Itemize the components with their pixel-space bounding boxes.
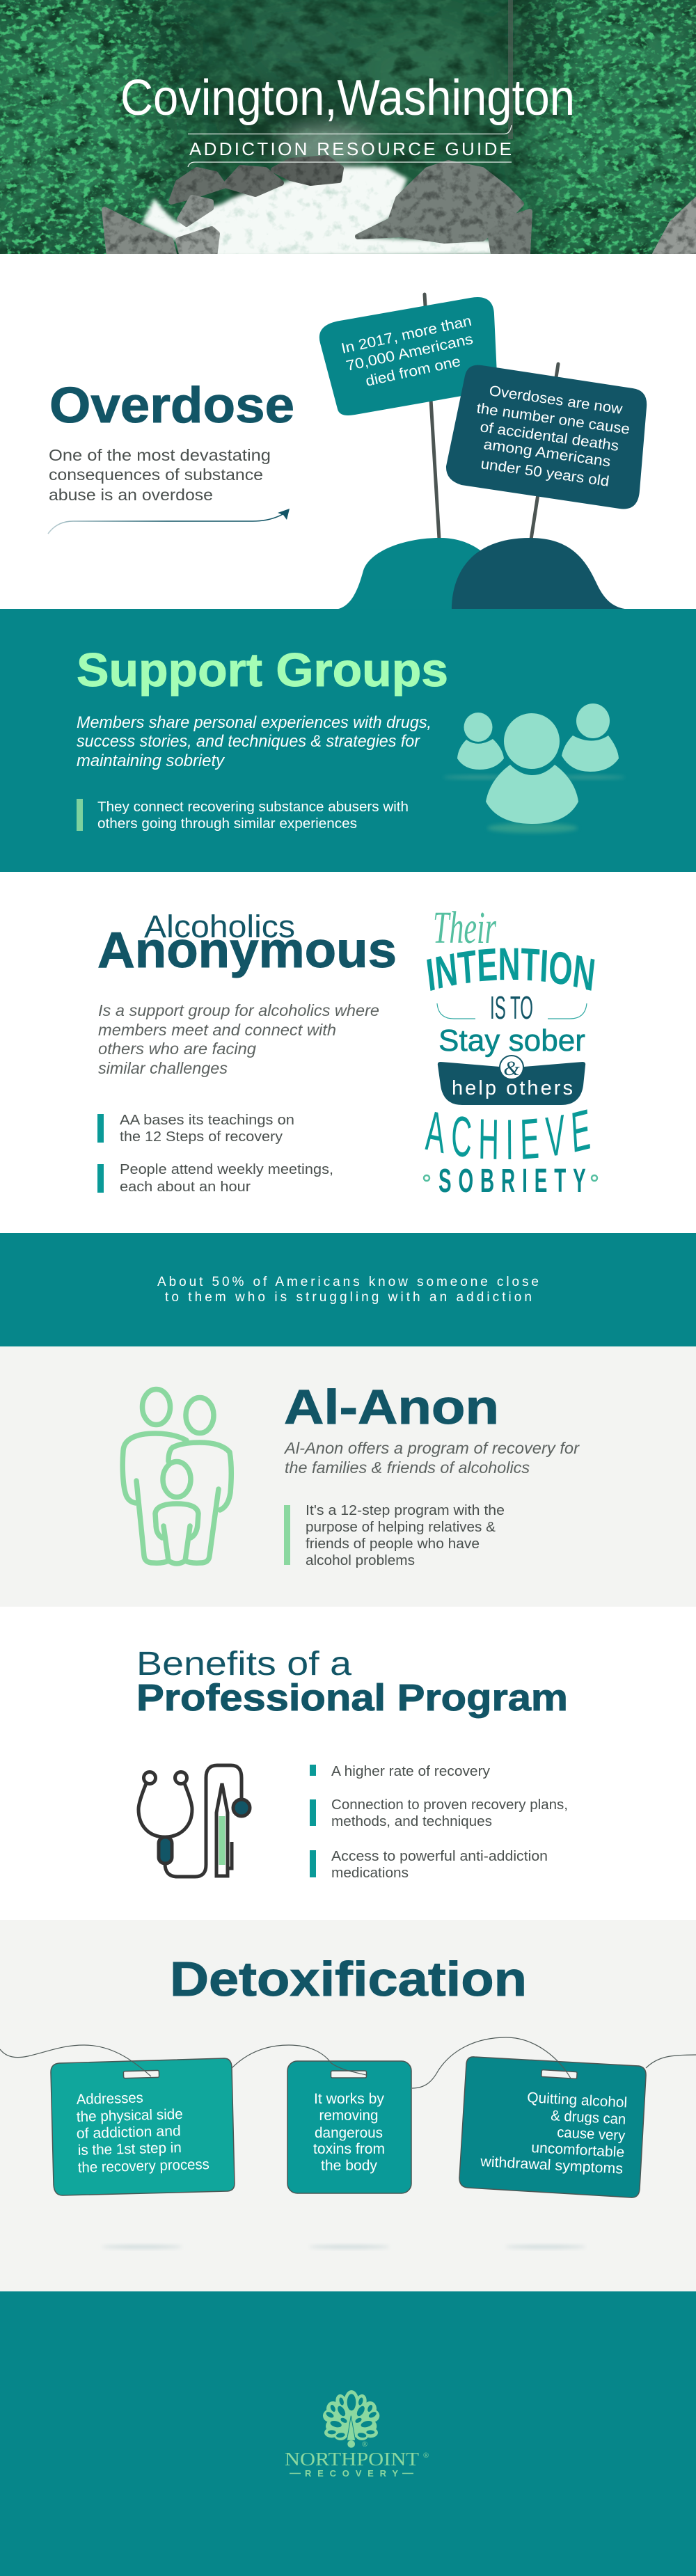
text: fifty percent statistic: [157, 1275, 539, 1305]
heading: benefits: Benefits of a: [136, 1646, 351, 1683]
text block: support description: success stories, and techniques & strategies for: [77, 732, 420, 751]
card: withdrawal symptoms: & drugs can: [551, 2108, 626, 2128]
sign: statistic two: [446, 365, 647, 509]
text: fifty percent statistic: to them who is struggling with an addiction: [165, 1290, 532, 1305]
callout: connect: others going through similar experiences: [97, 816, 357, 832]
panel: al-anon: [0, 1346, 696, 1607]
text block: AA description: Is a support group for alcoholics where: [98, 1001, 379, 1019]
text block: al-anon description: [283, 1439, 580, 1477]
heading: alcoholics anonymous: Alcoholics: [144, 909, 295, 944]
card: withdrawal symptoms: uncomfortable: [531, 2140, 625, 2161]
sign: statistic one: In 2017, more than: [340, 313, 473, 357]
rocks: [104, 158, 696, 257]
sign: statistic one: 70,000 Americans: [345, 331, 475, 374]
shadows under cards: [102, 2245, 586, 2248]
callout: twelve step program: alcohol problems: [306, 1553, 415, 1568]
sign: statistic two: among Americans: [482, 436, 612, 470]
card: removes toxins: the body: [321, 2158, 377, 2174]
typographic lockup: their intention: &: [503, 1057, 520, 1080]
heading: support groups: Support Groups: [77, 644, 448, 697]
card: withdrawal symptoms: Quitting alcohol: [527, 2090, 628, 2111]
heading: alcoholics anonymous: Anonymous: [97, 923, 397, 978]
sign: statistic two: Overdoses are now: [488, 383, 624, 418]
card: removes toxins: toxins from: [313, 2141, 385, 2157]
callout: connect: They connect recovering substance abusers with: [97, 800, 409, 815]
text block: AA description: similar challenges: [98, 1059, 228, 1077]
subtitle with rules: ADDICTION RESOURCE GUIDE: [189, 138, 512, 159]
sign: statistic two: the number one cause: [475, 400, 631, 438]
bullet: weekly meetings: [97, 1162, 333, 1195]
callout: twelve step program: [284, 1503, 505, 1568]
typographic lockup: their intention: ACHIEVE: [425, 1109, 590, 1159]
text block: overdose intro: abuse is an overdose: [49, 486, 213, 504]
text block: overdose intro: One of the most devastating: [49, 446, 271, 464]
typographic lockup: their intention: Their: [433, 903, 496, 953]
typographic lockup: their intention: INTENTION: [427, 948, 594, 991]
logo: northpoint recovery: [285, 2390, 429, 2479]
card: physical side: Addresses: [77, 2090, 143, 2108]
icon: peacock leaf mark: [323, 2390, 379, 2448]
typographic lockup: their intention: IS TO: [490, 989, 533, 1026]
sign: statistic one: died from one: [364, 353, 462, 390]
typographic lockup: their intention: SOBRIETY: [438, 1162, 586, 1200]
text block: AA description: [98, 1001, 379, 1077]
panel: overdose: [48, 294, 647, 610]
typographic lockup: their intention: Stay sober: [438, 1024, 585, 1058]
panel: hero header: [0, 0, 696, 264]
mound: teal: [333, 538, 505, 610]
text block: AA description: members meet and connect with: [98, 1021, 336, 1039]
panel: support groups: [0, 609, 696, 872]
bullet: medications: medications: [331, 1866, 409, 1881]
card: withdrawal symptoms: withdrawal symptoms: [480, 2154, 624, 2177]
bullet: twelve steps: AA bases its teachings on: [120, 1113, 294, 1128]
icon: family: [122, 1389, 231, 1564]
bullet: higher rate: A higher rate of recovery: [331, 1764, 490, 1779]
heading: al-anon: Al-Anon: [284, 1380, 499, 1434]
logo: northpoint recovery: ®: [362, 2440, 367, 2449]
card: removes toxins: removing: [319, 2108, 379, 2124]
icon: stethoscope and syringe: [139, 1765, 250, 1877]
card: withdrawal symptoms: cause very: [557, 2124, 626, 2144]
logo: northpoint recovery: RECOVERY: [305, 2468, 398, 2479]
bullet: connection: Connection to proven recovery plans,: [331, 1797, 568, 1813]
callout: connect: [77, 799, 409, 832]
subtitle with rules: [188, 125, 512, 167]
callout: twelve step program: purpose of helping relatives &: [306, 1520, 496, 1535]
bullet: connection: [310, 1797, 568, 1829]
panel: benefits of a professional program: [136, 1646, 568, 1881]
arrow: [48, 509, 290, 534]
mound: dark: [452, 538, 633, 610]
sign: statistic two: under 50 years old: [480, 456, 610, 490]
sign: statistic one: [319, 297, 498, 415]
string threading the cards: [0, 2037, 696, 2088]
bullet: twelve steps: [97, 1113, 294, 1145]
text block: support description: Members share personal experiences with drugs,: [77, 713, 432, 732]
bullet: weekly meetings: each about an hour: [120, 1179, 251, 1195]
typographic lockup: their intention: [423, 903, 599, 1200]
card: physical side: of addiction and: [77, 2123, 181, 2142]
text block: overdose intro: consequences of substance: [49, 466, 263, 484]
bullet: medications: [310, 1849, 548, 1881]
callout: twelve step program: friends of people who have: [306, 1536, 480, 1552]
heading: overdose: Overdose: [49, 378, 294, 434]
logo: northpoint recovery: ®: [423, 2451, 429, 2460]
card: physical side: the recovery process: [78, 2156, 209, 2176]
card: withdrawal symptoms: [459, 2057, 646, 2197]
sign posts: [425, 294, 558, 539]
card: removes toxins: It works by: [314, 2091, 384, 2107]
text block: AA description: others who are facing: [98, 1040, 256, 1058]
typographic lockup: their intention: help others: [452, 1077, 573, 1099]
card: physical side: the physical side: [77, 2106, 183, 2125]
bullet: twelve steps: the 12 Steps of recovery: [120, 1129, 283, 1145]
callout: twelve step program: It's a 12-step program with the: [306, 1503, 505, 1518]
heading: benefits: [136, 1646, 568, 1719]
text block: support description: [77, 713, 432, 770]
panel: detoxification: [0, 1920, 696, 2291]
icon: group of people: [443, 703, 625, 833]
card: physical side: is the 1st step in: [78, 2140, 182, 2158]
text block: support description: maintaining sobriety: [77, 752, 226, 770]
title: Covington,Washington: [120, 70, 575, 126]
card: physical side: [51, 2058, 235, 2195]
logo: northpoint recovery: NORTHPOINT: [285, 2449, 420, 2470]
panel: footer: [0, 2291, 696, 2576]
bullet: medications: Access to powerful anti-addiction: [331, 1849, 548, 1864]
heading: detoxification: Detoxification: [170, 1952, 527, 2006]
text: fifty percent statistic: About 50% of Americans know someone close: [157, 1275, 539, 1289]
bullet: connection: methods, and techniques: [331, 1814, 492, 1829]
water rapids: [143, 167, 529, 257]
sign: statistic two: of accidental deaths: [479, 419, 620, 454]
panel: alcoholics anonymous: [97, 903, 599, 1200]
text block: overdose intro: [49, 446, 271, 504]
card: removes toxins: [287, 2061, 411, 2193]
card: removes toxins: dangerous: [315, 2125, 383, 2141]
heading: benefits: Professional Program: [136, 1677, 568, 1719]
text block: al-anon description: Al-Anon offers a program of recovery for: [283, 1439, 580, 1457]
panel: statistic banner: [0, 1233, 696, 1346]
text block: al-anon description: the families & friends of alcoholics: [285, 1458, 530, 1477]
bullet: weekly meetings: People attend weekly meetings,: [120, 1162, 333, 1177]
